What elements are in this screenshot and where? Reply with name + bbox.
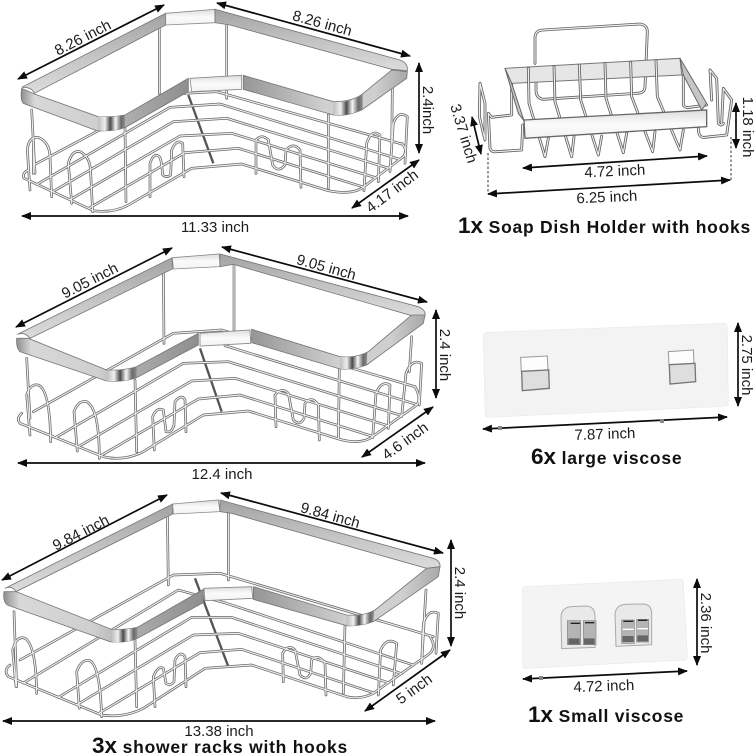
dimension arrows — [2, 493, 451, 721]
dimension labels: 4.72 inch — [573, 677, 635, 696]
right clip holder — [615, 604, 652, 646]
dimension labels: 11.33 inch — [181, 219, 249, 236]
dimension labels: 9.84 inch — [50, 512, 112, 554]
panel: small viscose — [523, 579, 714, 727]
dimension labels — [52, 7, 436, 236]
right hook — [668, 350, 696, 384]
dimension labels: 7.87 inch — [574, 425, 636, 444]
dimension labels: 2.75 inch — [738, 335, 755, 395]
dimension labels — [574, 335, 755, 444]
left hook — [521, 356, 549, 391]
dimension labels: 12.4 inch — [192, 466, 252, 483]
dimension labels: 4.17 inch — [363, 166, 422, 217]
dimension labels: 9.84 inch — [299, 499, 362, 532]
adhesive plate with clips — [523, 579, 687, 668]
dimension arrows — [523, 579, 697, 680]
rack illustration — [17, 254, 425, 458]
dimension labels: 3.37 inch — [446, 102, 480, 165]
dimension labels: 6.25 inch — [576, 188, 638, 207]
dimension labels: 5 inch — [393, 671, 436, 708]
panel: medium-size corner rack 9.05 inch — [16, 247, 453, 483]
dimension labels — [446, 97, 755, 207]
dimension labels: 2.4inch — [419, 86, 436, 134]
rack illustration — [4, 500, 440, 717]
adhesive plate with hooks — [483, 323, 728, 417]
panel: large-size corner rack 8.26 inch — [18, 3, 436, 236]
panel: small-size corner rack 9.84 inch — [2, 493, 468, 755]
panel: large viscose — [483, 323, 755, 469]
dimension labels: 13.38 inch — [184, 723, 254, 740]
dimension labels — [50, 499, 468, 740]
dimension labels: 2.4 inch — [451, 567, 468, 619]
dimension arrows — [472, 103, 736, 194]
dimension labels: 8.26 inch — [291, 7, 354, 40]
rack illustration — [21, 9, 407, 212]
panel: soap dish holder — [446, 24, 755, 238]
heading: small viscose: 1x Small viscose — [528, 702, 684, 727]
dimension labels: 9.05 inch — [295, 251, 358, 284]
soap dish illustration — [479, 24, 732, 157]
heading: large viscose: 6x large viscose — [531, 444, 682, 469]
dimension arrows — [16, 247, 436, 463]
heading: soap dish: 1x Soap Dish Holder with hooks — [458, 213, 751, 238]
dimension labels: 2.4 inch — [436, 329, 453, 381]
dimension labels: 4.72 inch — [584, 162, 646, 181]
dimension labels: 4.6 inch — [379, 419, 432, 464]
left clip holder — [561, 606, 596, 649]
dimension labels — [573, 593, 714, 696]
dimension arrows — [18, 3, 419, 216]
dimension labels — [59, 251, 453, 483]
dimension labels: 2.36 inch — [697, 593, 714, 653]
dimension labels: 8.26 inch — [52, 17, 114, 59]
dimension arrows — [483, 323, 738, 430]
dimension labels: 9.05 inch — [59, 260, 121, 302]
